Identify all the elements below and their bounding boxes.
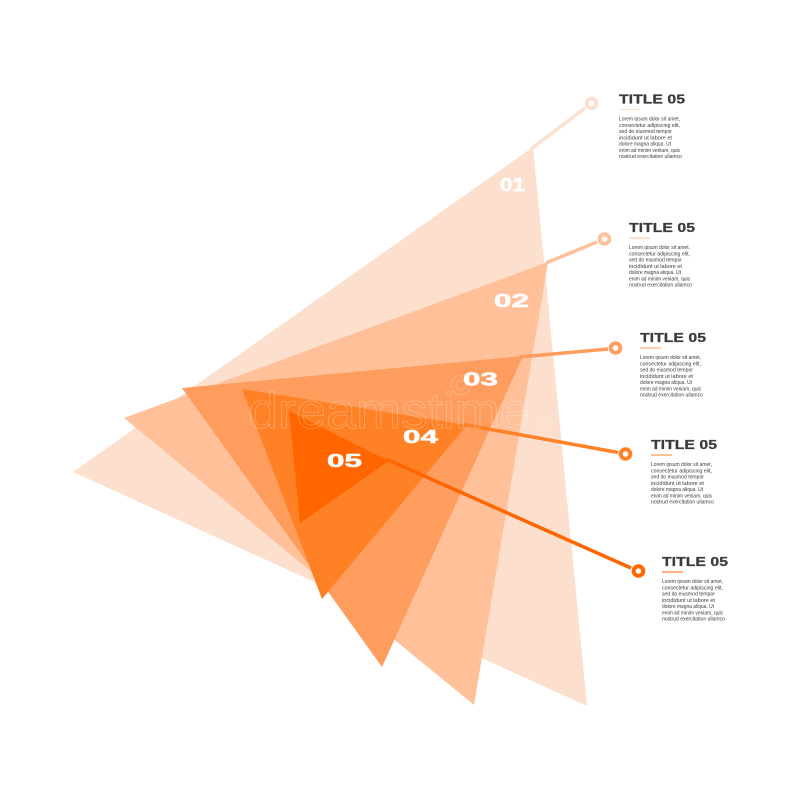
- text block 1: Lorem ipsum dolor sit amet,: [619, 116, 680, 122]
- text block 4: sed do eiusmod tempor: [651, 474, 704, 480]
- text block 3: dolore magna aliqua. Ut: [640, 380, 693, 386]
- text block 1: enim ad minim veniam, quis: [619, 148, 680, 154]
- layer 4: strong orange triangle with connector and marker: [242, 389, 630, 599]
- text block 2: consectetur adipiscing elit,: [629, 251, 690, 257]
- text block 4: dolore magna aliqua. Ut: [651, 487, 704, 493]
- layer 3: medium orange triangle with connector and marker: [182, 343, 620, 667]
- text block 4: Lorem ipsum dolor sit amet,: [651, 462, 712, 468]
- number 04: 04: [403, 427, 438, 447]
- text block 1: nostrud exercitation ullamco: [619, 154, 682, 160]
- number 01: 01: [500, 175, 525, 195]
- text block 4: nostrud exercitation ullamco: [651, 500, 714, 506]
- text block 3: incididunt ut labore et: [640, 374, 694, 380]
- text block 5: [662, 555, 728, 623]
- text block 3: sed do eiusmod tempor: [640, 368, 693, 374]
- text block 5: TITLE 05: [662, 555, 728, 569]
- layer 5: deepest orange triangle with connector and marker: [289, 411, 643, 576]
- text block 5: sed do eiusmod tempor: [662, 592, 715, 598]
- text block 4: TITLE 05: [651, 438, 717, 452]
- number 05: 05: [327, 451, 362, 471]
- text block 1: sed do eiusmod tempor: [619, 129, 672, 135]
- text block 2: Lorem ipsum dolor sit amet,: [629, 245, 690, 251]
- text block 5: incididunt ut labore et: [662, 598, 716, 604]
- text block 1: TITLE 05: [619, 92, 685, 106]
- text block 3: enim ad minim veniam, quis: [640, 386, 701, 392]
- text block 4: enim ad minim veniam, quis: [651, 493, 712, 499]
- text block 2: sed do eiusmod tempor: [629, 258, 682, 264]
- text block 5: nostrud exercitation ullamco: [662, 617, 725, 623]
- text block 1: consectetur adipiscing elit,: [619, 123, 680, 129]
- text block 3: [640, 331, 706, 399]
- text block 5: Lorem ipsum dolor sit amet,: [662, 579, 723, 585]
- text block 2: enim ad minim veniam, quis: [629, 276, 690, 282]
- layer 2: light orange triangle with connector and marker: [124, 234, 609, 705]
- text block 2: TITLE 05: [629, 221, 695, 235]
- text block 1: dolore magna aliqua. Ut: [619, 142, 672, 148]
- text block 5: enim ad minim veniam, quis: [662, 610, 723, 616]
- text block 5: consectetur adipiscing elit,: [662, 585, 723, 591]
- text block 5: dolore magna aliqua. Ut: [662, 604, 715, 610]
- number 03: 03: [463, 370, 498, 390]
- text block 1: incididunt ut labore et: [619, 135, 673, 141]
- text block 2: dolore magna aliqua. Ut: [629, 270, 682, 276]
- text block 2: incididunt ut labore et: [629, 264, 683, 270]
- text block 2: [629, 221, 695, 289]
- text block 4: consectetur adipiscing elit,: [651, 468, 712, 474]
- layer 1: lightest triangle with connector and marker: [73, 99, 596, 706]
- text block 4: incididunt ut labore et: [651, 481, 705, 487]
- text block 4: [651, 438, 717, 506]
- text block 2: nostrud exercitation ullamco: [629, 283, 692, 289]
- text block 3: nostrud exercitation ullamco: [640, 393, 703, 399]
- text block 3: Lorem ipsum dolor sit amet,: [640, 355, 701, 361]
- number 02: 02: [494, 291, 529, 311]
- text block 1: [619, 92, 685, 160]
- text block 3: consectetur adipiscing elit,: [640, 361, 701, 367]
- text block 3: TITLE 05: [640, 331, 706, 345]
- watermark: dreamstime: [248, 383, 530, 439]
